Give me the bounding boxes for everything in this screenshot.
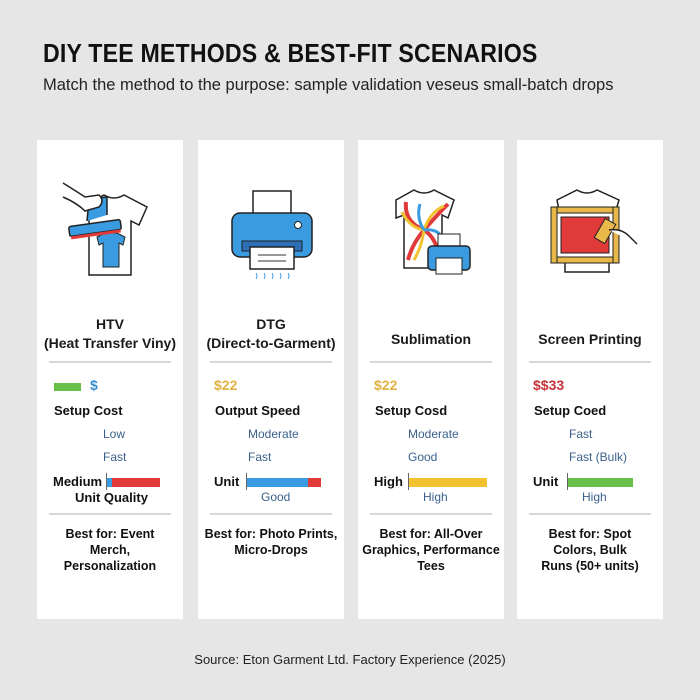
best for: Best for: Photo Prints, xyxy=(205,527,337,541)
panel: Sublimation xyxy=(358,140,504,619)
metrics: Setup Cosd xyxy=(375,403,447,418)
best for: Best for: All-Over xyxy=(379,527,483,541)
panel: DTG: Moderate xyxy=(248,427,299,441)
best for xyxy=(64,527,156,573)
best for xyxy=(362,527,500,573)
source: Source: Eton Garment Ltd. Factory Experience (2025) xyxy=(194,652,506,667)
heading: (Heat Transfer Viny) xyxy=(44,335,176,351)
price: $22 xyxy=(374,377,397,393)
heading: Screen Printing xyxy=(538,331,642,347)
panel: DTG xyxy=(198,140,344,619)
panel: DTG: Good xyxy=(261,490,290,504)
panel: Sublimation: High xyxy=(374,474,403,489)
panel: HTV xyxy=(37,140,183,619)
panel: HTV: Unit Quality xyxy=(75,490,148,505)
bar xyxy=(247,478,321,487)
panel: Screen Printing: Fast xyxy=(569,427,592,441)
best for: Best for: Event xyxy=(66,527,154,541)
icon: printer xyxy=(231,190,313,280)
heading: DTG xyxy=(256,316,286,332)
bar xyxy=(568,478,633,487)
panel: Screen Printing xyxy=(517,140,663,619)
heading: (Direct-to-Garment) xyxy=(206,335,336,351)
icon: screen frame with squeegee xyxy=(550,189,638,273)
best for xyxy=(541,527,639,573)
metrics: Output Speed xyxy=(215,403,300,418)
panel: Screen Printing: High xyxy=(582,490,607,504)
best for: Merch, xyxy=(90,543,130,557)
title: DIY TEE METHODS & BEST-FIT SCENARIOS xyxy=(43,38,538,68)
metrics: Setup Coed xyxy=(534,403,606,418)
panel: Screen Printing: Unit xyxy=(533,474,558,489)
best for xyxy=(205,527,337,557)
metrics: Setup Cost xyxy=(54,403,123,418)
best for: Tees xyxy=(417,559,445,573)
panel: HTV: $ xyxy=(90,377,98,393)
panel: Sublimation: High xyxy=(423,490,448,504)
panel: HTV: Medium xyxy=(53,474,102,489)
price: $22 xyxy=(214,377,237,393)
bar xyxy=(409,478,487,487)
heading: Sublimation xyxy=(391,331,471,347)
best for: Micro-Drops xyxy=(234,543,308,557)
panel: Screen Printing: Fast (Bulk) xyxy=(569,450,627,464)
bar: quality xyxy=(107,478,160,487)
best for: Best for: Spot xyxy=(549,527,631,541)
panel: DTG: Fast xyxy=(248,450,271,464)
panel: Sublimation: Moderate xyxy=(408,427,459,441)
panel: DTG: Unit xyxy=(214,474,239,489)
panel: HTV: Fast xyxy=(103,450,126,464)
heading: HTV xyxy=(96,316,124,332)
icon: heat press on tee xyxy=(62,182,148,276)
icon: tie-dye tee with printer xyxy=(395,189,471,274)
best for: Runs (50+ units) xyxy=(541,559,639,573)
heading xyxy=(44,316,176,351)
best for: Graphics, Performance xyxy=(362,543,500,557)
panel: Sublimation: Good xyxy=(408,450,437,464)
subtitle: Match the method to the purpose: sample validation veseus small-batch drops xyxy=(43,76,613,94)
best for: Colors, Bulk xyxy=(553,543,627,557)
price: $$33 xyxy=(533,377,564,393)
price indicator xyxy=(54,383,81,391)
panel: HTV: Low xyxy=(103,427,125,441)
best for: Personalization xyxy=(64,559,156,573)
heading xyxy=(206,316,336,351)
